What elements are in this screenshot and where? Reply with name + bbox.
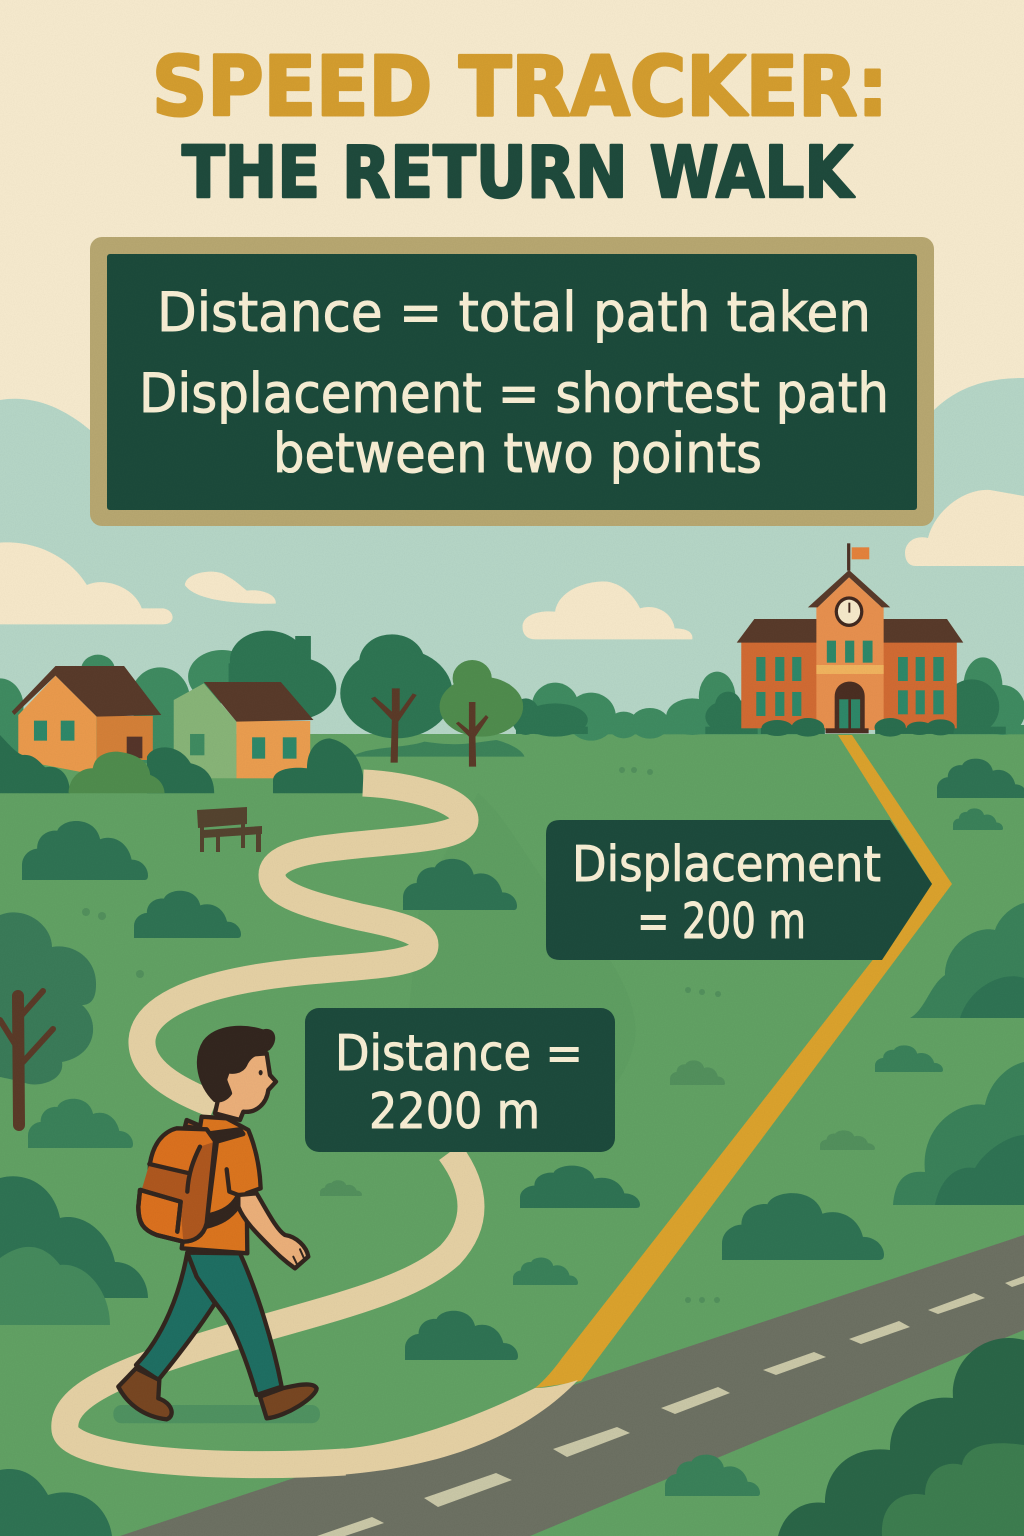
bushes around houses and school	[0, 718, 955, 793]
school building	[737, 543, 963, 733]
bare trees	[371, 688, 489, 767]
ground	[0, 734, 1024, 1536]
hair	[199, 1028, 273, 1100]
definition text: Displacement = shortest path	[139, 362, 889, 425]
sky background	[0, 0, 1024, 760]
walking student	[113, 1028, 320, 1423]
neck and face	[215, 1053, 276, 1120]
eye	[259, 1070, 263, 1075]
distance label	[305, 1008, 615, 1152]
back leg	[136, 1253, 215, 1380]
road	[120, 1235, 1024, 1536]
distance label: 2200 m	[369, 1083, 540, 1140]
flag	[847, 543, 869, 571]
distance label: Distance =	[335, 1025, 583, 1082]
backpack strap	[207, 1129, 243, 1227]
front boot	[260, 1384, 317, 1418]
road dashes	[317, 1276, 1024, 1536]
bench	[197, 807, 262, 852]
displacement label: Displacement	[572, 836, 881, 893]
backpack	[138, 1120, 217, 1242]
house left	[12, 666, 161, 775]
definition text: between two points	[273, 422, 762, 485]
displacement line	[535, 735, 952, 1388]
title line 1: SPEED TRACKER:	[152, 40, 888, 135]
clock	[835, 596, 863, 627]
house right	[174, 682, 313, 778]
distance path: winding	[65, 783, 578, 1475]
shirt	[182, 1117, 261, 1253]
mid-tone bushes	[28, 808, 1003, 1496]
displacement label: = 200 m	[637, 893, 806, 950]
arm	[238, 1193, 308, 1268]
path end at the road	[340, 1380, 578, 1475]
hill shading	[400, 793, 636, 1120]
definition text: Distance = total path taken	[157, 281, 871, 344]
large trees and shrubs on the edges	[0, 903, 1024, 1536]
distant tree line	[0, 631, 1024, 763]
back boot	[118, 1368, 172, 1419]
bushes on the meadow	[22, 759, 1024, 1496]
dark bushes	[22, 759, 1024, 1360]
sleeve seam	[227, 1169, 238, 1195]
left tree	[0, 912, 96, 1125]
title	[152, 40, 888, 214]
definition panel	[90, 237, 934, 526]
clouds	[0, 490, 1024, 639]
displacement label	[546, 820, 932, 960]
front leg	[187, 1253, 282, 1395]
definition text	[139, 281, 889, 485]
faint tufts	[82, 767, 875, 1303]
title line 2: THE RETURN WALK	[182, 131, 856, 214]
